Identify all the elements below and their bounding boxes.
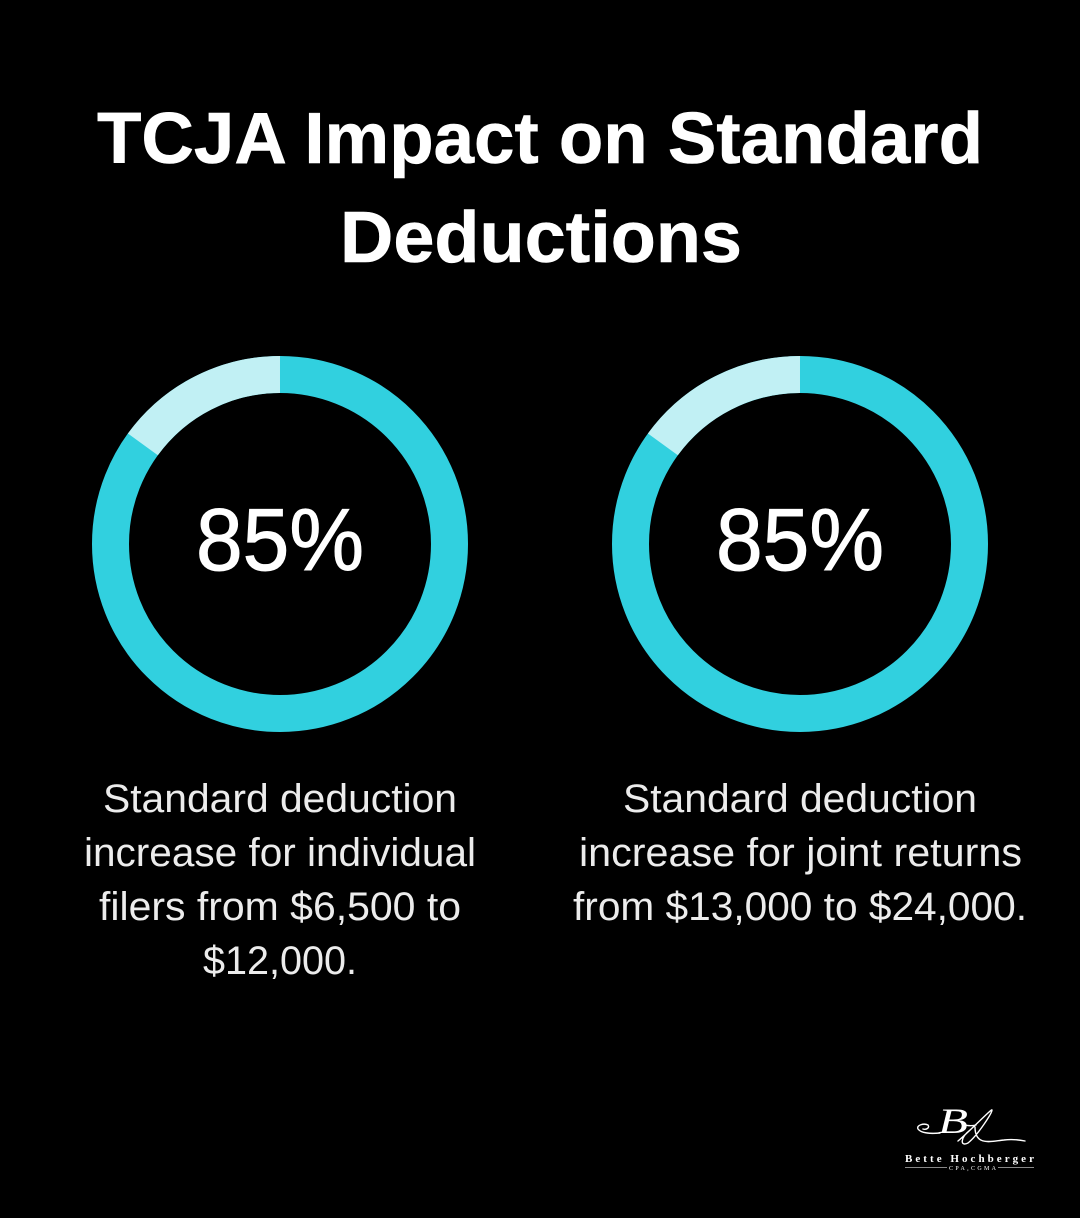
logo: Bette Hochberger signature: B [938, 1101, 968, 1141]
donut chart: joint returns 85% [630, 374, 970, 714]
donut chart: individual filers 85%: 85% [196, 490, 364, 589]
title: TCJA Impact on Standard [97, 99, 983, 179]
text block: joint returns description: from $13,000 to $24,000. [573, 885, 1027, 929]
text block: individual filers description: $12,000. [203, 939, 357, 983]
text block: individual filers description: Standard deduction [103, 777, 457, 821]
donut chart: individual filers 85% [110, 374, 450, 714]
title [97, 99, 983, 278]
text block: joint returns description: increase for joint returns [579, 831, 1022, 875]
panel: individual filers [84, 374, 476, 983]
donut chart: joint returns 85%: 85% [716, 490, 884, 589]
text block: individual filers description: filers from $6,500 to [99, 885, 461, 929]
text block: joint returns description: Standard deduction [623, 777, 977, 821]
text block: individual filers description [84, 777, 476, 983]
logo: Bette Hochberger signature: CPA,CGMA [949, 1166, 997, 1172]
logo: Bette Hochberger signature: Bette Hochberger [905, 1153, 1034, 1165]
text block: joint returns description [573, 777, 1027, 929]
text block: individual filers description: increase for individual [84, 831, 476, 875]
panel: joint returns [573, 374, 1027, 929]
logo: Bette Hochberger signature [905, 1101, 1034, 1172]
title: Deductions [340, 198, 742, 278]
